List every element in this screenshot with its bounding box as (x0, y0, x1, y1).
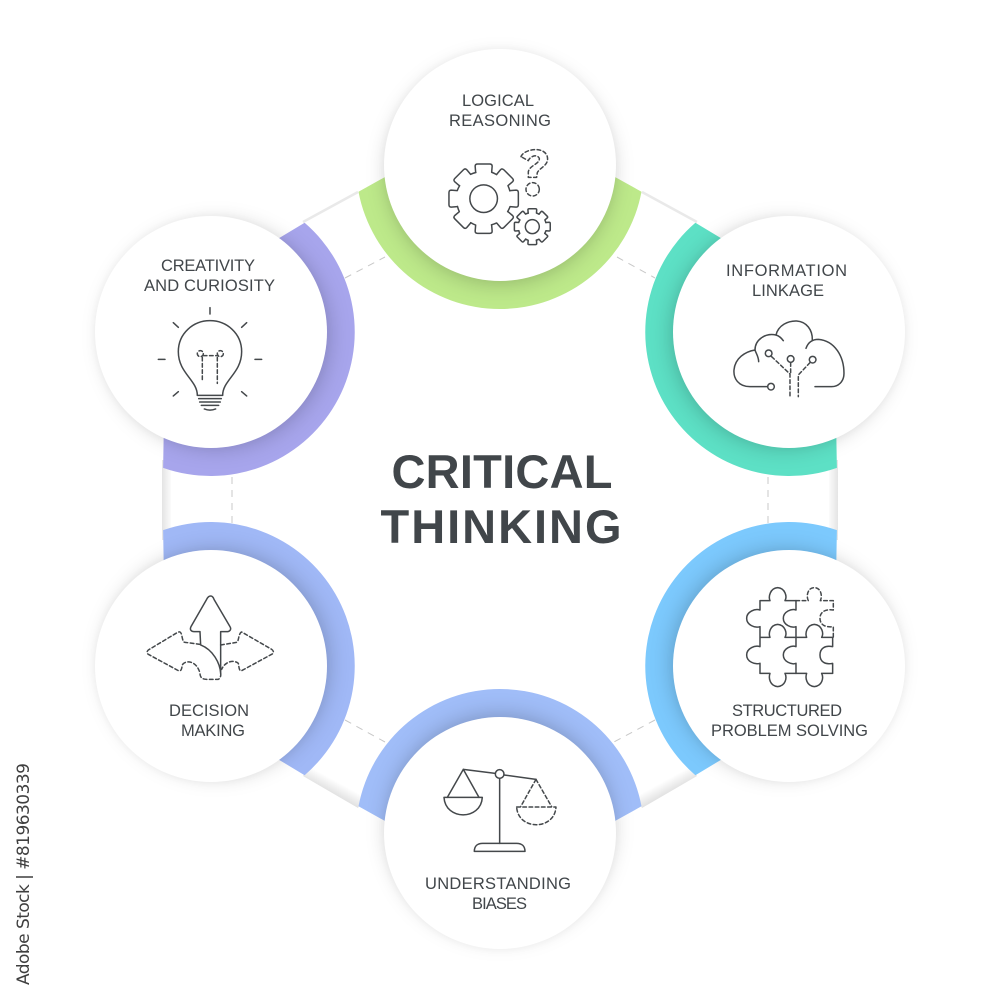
label: BIASES (472, 895, 527, 913)
hexagon connector bands (162, 192, 838, 808)
node: understanding biases (358, 689, 642, 949)
disc (673, 550, 905, 782)
label: REASONING (449, 112, 551, 130)
disc (673, 216, 905, 448)
label: LOGICAL (462, 92, 534, 110)
node: structured problem solving (594, 471, 905, 783)
disc (95, 216, 327, 448)
title: CRITICAL (392, 445, 612, 498)
label (711, 702, 868, 740)
label (169, 702, 249, 740)
label: DECISION (169, 702, 249, 720)
label: CREATIVITY (161, 257, 255, 275)
label (425, 875, 571, 913)
dashed inner hexagon connectors (232, 257, 768, 743)
disc (384, 49, 616, 281)
icon: puzzle (747, 588, 833, 687)
label: INFORMATION (726, 262, 847, 280)
icon: light bulb (158, 308, 262, 410)
icon: gears and question mark (449, 150, 550, 245)
node: information linkage (594, 215, 905, 527)
ring: green arc (358, 177, 642, 309)
ring: blue arc (150, 471, 406, 783)
title: THINKING (380, 500, 622, 553)
stock id side text: Adobe Stock | #819630339 (14, 763, 34, 985)
ring: sky blue arc (594, 471, 850, 783)
ring: teal arc (594, 215, 850, 527)
label: PROBLEM SOLVING (711, 722, 868, 740)
icon: cloud network (734, 321, 844, 397)
icon: diverging arrows (147, 596, 273, 679)
icon: balance scale (444, 769, 556, 851)
ring: violet arc (150, 215, 406, 527)
disc (95, 550, 327, 782)
label (726, 262, 847, 300)
node: logical reasoning (358, 49, 642, 309)
label (449, 92, 551, 130)
disc (384, 717, 616, 949)
ring: periwinkle arc (358, 689, 642, 821)
label: UNDERSTANDING (425, 875, 571, 893)
node: decision making (95, 471, 406, 783)
label: STRUCTURED (732, 702, 842, 720)
node: creativity and curiosity (95, 215, 406, 527)
label (144, 257, 275, 295)
title (380, 445, 622, 553)
label: MAKING (181, 722, 245, 740)
label: LINKAGE (752, 282, 824, 300)
label: AND CURIOSITY (144, 277, 275, 295)
